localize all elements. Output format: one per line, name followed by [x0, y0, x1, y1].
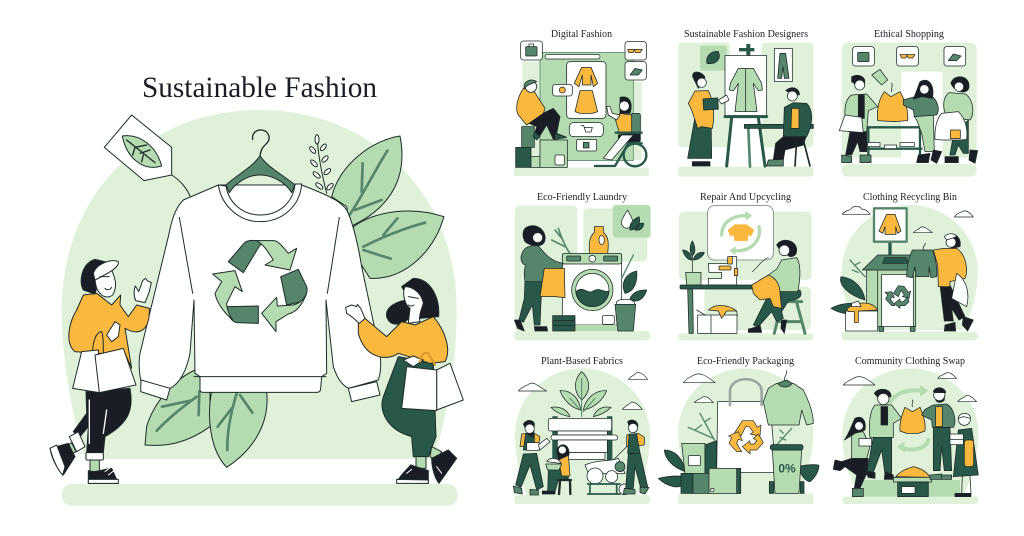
- rack: [868, 127, 922, 160]
- plant left: [688, 413, 714, 440]
- leaves behind sweatshirt: [145, 136, 444, 467]
- panel: sustainable fashion designers: [678, 29, 813, 177]
- clouds: [518, 373, 648, 409]
- yellow jacket on hanger: [900, 400, 925, 433]
- icon: yellow recycling symbol: [728, 421, 763, 454]
- sprig: [309, 135, 334, 193]
- bench with yarn: [587, 462, 630, 495]
- icon: plus: [739, 44, 754, 55]
- heading: Ethical Shopping: [874, 29, 945, 40]
- panel: digital fashion: [514, 29, 649, 176]
- bearded man: [922, 388, 955, 479]
- detergent bottle: [589, 227, 608, 253]
- person holding shirt: [514, 226, 565, 331]
- tag: [872, 69, 888, 85]
- boxes: [516, 127, 567, 167]
- title: Sustainable Fashion: [142, 71, 377, 104]
- character: right shopper: [346, 278, 463, 483]
- swap arrows: [888, 385, 928, 453]
- designer seated: [767, 88, 812, 166]
- icons: product cards: [853, 47, 966, 66]
- box of clothes: [893, 467, 932, 497]
- sweater on hanger: [763, 371, 813, 425]
- icon: leaf tag: [104, 115, 190, 196]
- heading: Community Clothing Swap: [855, 356, 965, 367]
- plant: [551, 372, 611, 417]
- plant left: [552, 228, 570, 253]
- stool: [774, 302, 805, 333]
- clouds: [683, 374, 715, 403]
- rollers: [548, 417, 625, 473]
- sprig: [777, 428, 792, 445]
- sign with sweater: [874, 208, 907, 255]
- tote bag: [717, 379, 776, 473]
- icon: leaf box: [700, 46, 727, 71]
- person seated with phone: [517, 80, 567, 140]
- heading: Eco-Friendly Packaging: [697, 356, 795, 367]
- monitor with recycled top: [708, 206, 773, 260]
- person with bag: [933, 234, 973, 331]
- icon: droplet and leaves: [613, 205, 651, 238]
- table: [680, 285, 755, 333]
- panel: clothing recycling bin: [831, 192, 978, 340]
- shopper with sweater: [935, 77, 978, 163]
- clouds: [843, 373, 977, 402]
- hanger: [226, 130, 295, 193]
- sewing machine: [708, 257, 738, 285]
- boxes: [681, 441, 741, 493]
- leaves: [831, 277, 865, 314]
- platform: [862, 480, 960, 497]
- recycling bin: [862, 255, 917, 331]
- towels: [553, 316, 575, 331]
- designer standing: [688, 72, 729, 166]
- heading: Eco-Friendly Laundry: [537, 192, 628, 203]
- person with jacket: [865, 389, 902, 479]
- table: [748, 128, 750, 167]
- character: left shopper: [50, 259, 151, 483]
- hanging sweater: [907, 243, 937, 278]
- shopper with bag: [839, 75, 878, 163]
- worker left: [513, 420, 550, 495]
- panel: eco-friendly laundry: [514, 192, 651, 340]
- ground strip: [62, 484, 457, 506]
- washing machine: [562, 253, 622, 331]
- bin with percent label: 0%: [778, 461, 796, 475]
- heading: Clothing Recycling Bin: [863, 192, 958, 203]
- panel: eco-friendly packaging: [658, 356, 819, 504]
- shopper in green: [903, 80, 942, 163]
- person sewing: [748, 240, 801, 333]
- icon: recycling symbol: [213, 240, 307, 332]
- screen: [540, 52, 633, 161]
- easel: [725, 117, 767, 166]
- panel: plant-based fabrics: [513, 356, 650, 504]
- heading: Sustainable Fashion Designers: [684, 29, 808, 40]
- icons: product cards: [521, 41, 646, 151]
- hanging dress card: [774, 48, 792, 82]
- leaves: [658, 450, 819, 487]
- heading: Plant-Based Fabrics: [541, 356, 623, 367]
- yellow vest on hanger: [877, 83, 908, 122]
- heading: Repair And Upcycling: [700, 192, 792, 203]
- panel: repair and upcycling: [678, 192, 813, 340]
- laundry basket: [846, 301, 878, 331]
- potted plant: [683, 241, 704, 285]
- panel: ethical shopping: [839, 29, 978, 177]
- plant and basket: [615, 255, 647, 331]
- heading: Digital Fashion: [551, 29, 613, 40]
- clouds: [842, 206, 973, 233]
- dress on canvas: [725, 56, 767, 116]
- panel: community clothing swap: [833, 356, 978, 504]
- girl with books: [833, 417, 872, 497]
- panel: main illustration: [50, 110, 463, 506]
- sweatshirt: [139, 130, 381, 402]
- person in wheelchair: [595, 97, 646, 166]
- clothing card: [567, 62, 606, 118]
- seated woman: [542, 445, 571, 494]
- box of fabric: [697, 305, 737, 333]
- bin with percent label: [769, 445, 804, 493]
- older woman: [950, 413, 978, 497]
- background arch: [62, 110, 457, 459]
- worker right: [613, 420, 649, 494]
